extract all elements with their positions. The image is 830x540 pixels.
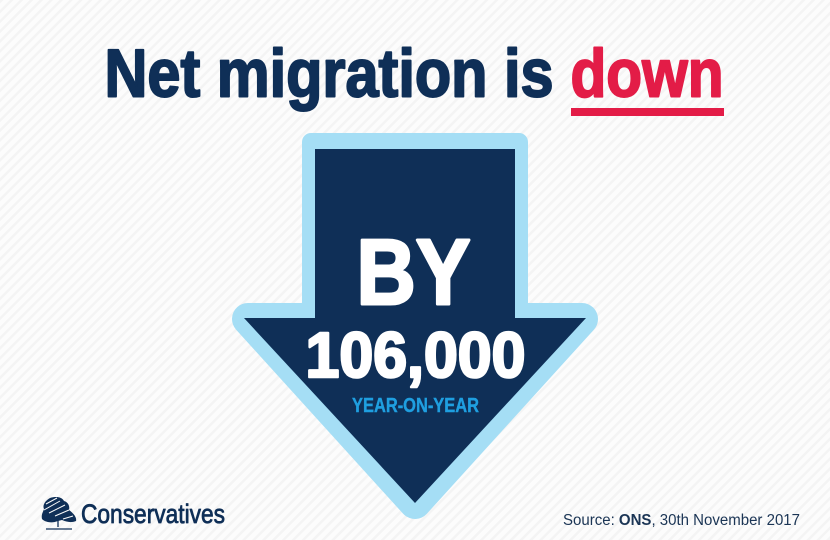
arrow text: BY: BY xyxy=(356,220,470,324)
highlighted word: down: down xyxy=(570,36,724,112)
arrow graphic xyxy=(244,142,586,503)
icon: oak tree xyxy=(42,497,76,529)
title: Net migration is xyxy=(104,36,554,112)
arrow outline xyxy=(248,142,582,503)
logo wordmark: Conservatives xyxy=(81,499,225,529)
arrow text: year-on-year: YEAR-ON-YEAR xyxy=(352,395,479,417)
arrow text: 106,000: 106,000 xyxy=(306,319,526,391)
arrow body xyxy=(244,149,586,503)
logo: Conservatives xyxy=(42,497,225,529)
source note: Source: ONS, 30th November 2017 xyxy=(563,512,800,529)
